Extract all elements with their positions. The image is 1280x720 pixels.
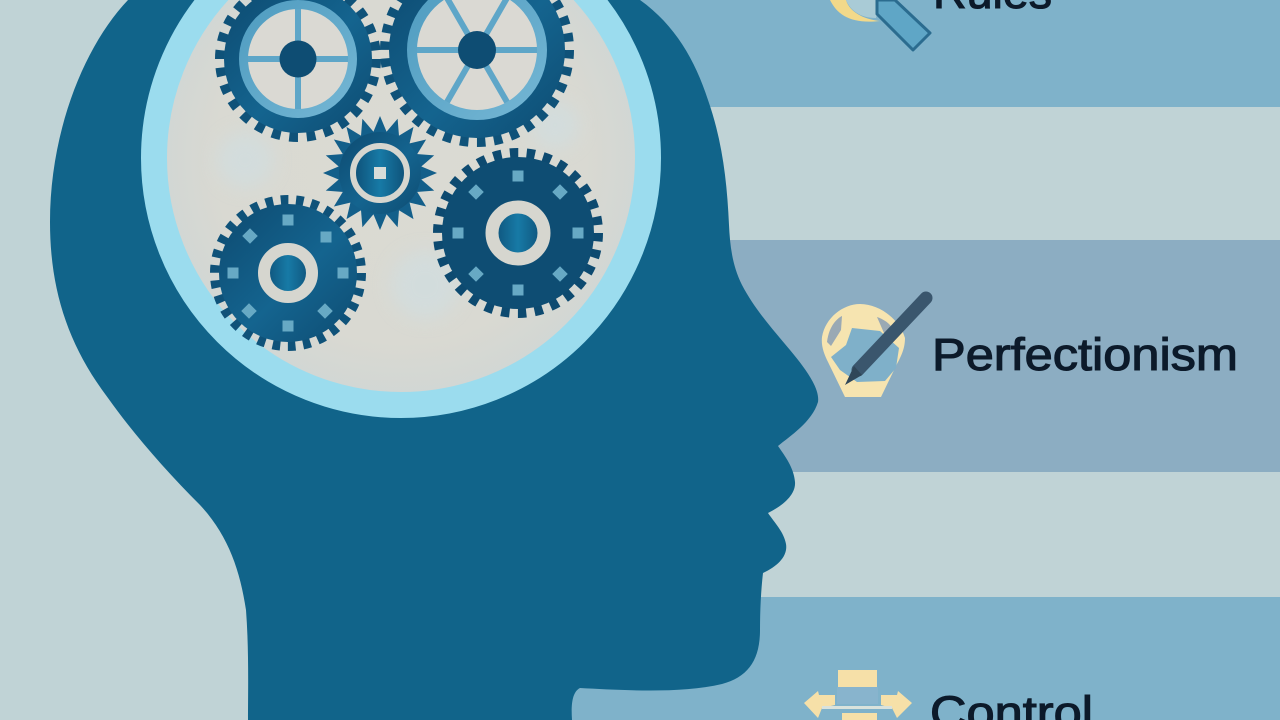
icon: perfectionism head and pen xyxy=(822,298,926,397)
band: light lower xyxy=(560,472,1280,597)
icon: rules magnifier xyxy=(830,0,930,50)
left arrow xyxy=(804,691,835,718)
crescent xyxy=(830,0,880,22)
band: control xyxy=(560,597,1280,720)
gear: small centre xyxy=(323,116,437,230)
upper patches xyxy=(827,316,842,346)
bottom box xyxy=(842,713,877,720)
band: light upper xyxy=(560,107,1280,240)
label: perfectionism: Perfectionism xyxy=(932,329,1238,380)
gear: upper left xyxy=(220,0,376,137)
gear: lower right xyxy=(438,153,598,313)
head outline xyxy=(822,304,905,397)
pen nib xyxy=(845,366,862,385)
lens xyxy=(846,0,880,18)
brain ring xyxy=(154,0,648,405)
brain window xyxy=(154,0,648,405)
head silhouette xyxy=(50,0,818,720)
faint background cogs xyxy=(217,101,579,319)
band: perfectionism xyxy=(560,240,1280,472)
centre band xyxy=(837,687,878,704)
gear: lower left xyxy=(215,200,361,346)
inner blue shape xyxy=(831,328,899,382)
right arrow xyxy=(881,691,912,718)
top box xyxy=(838,670,877,687)
icon: control arrows and boxes xyxy=(804,670,912,720)
handle xyxy=(877,0,930,50)
lower strip xyxy=(822,706,892,709)
gear: upper right xyxy=(385,0,569,142)
pen xyxy=(858,298,926,370)
band: rules xyxy=(560,0,1280,107)
